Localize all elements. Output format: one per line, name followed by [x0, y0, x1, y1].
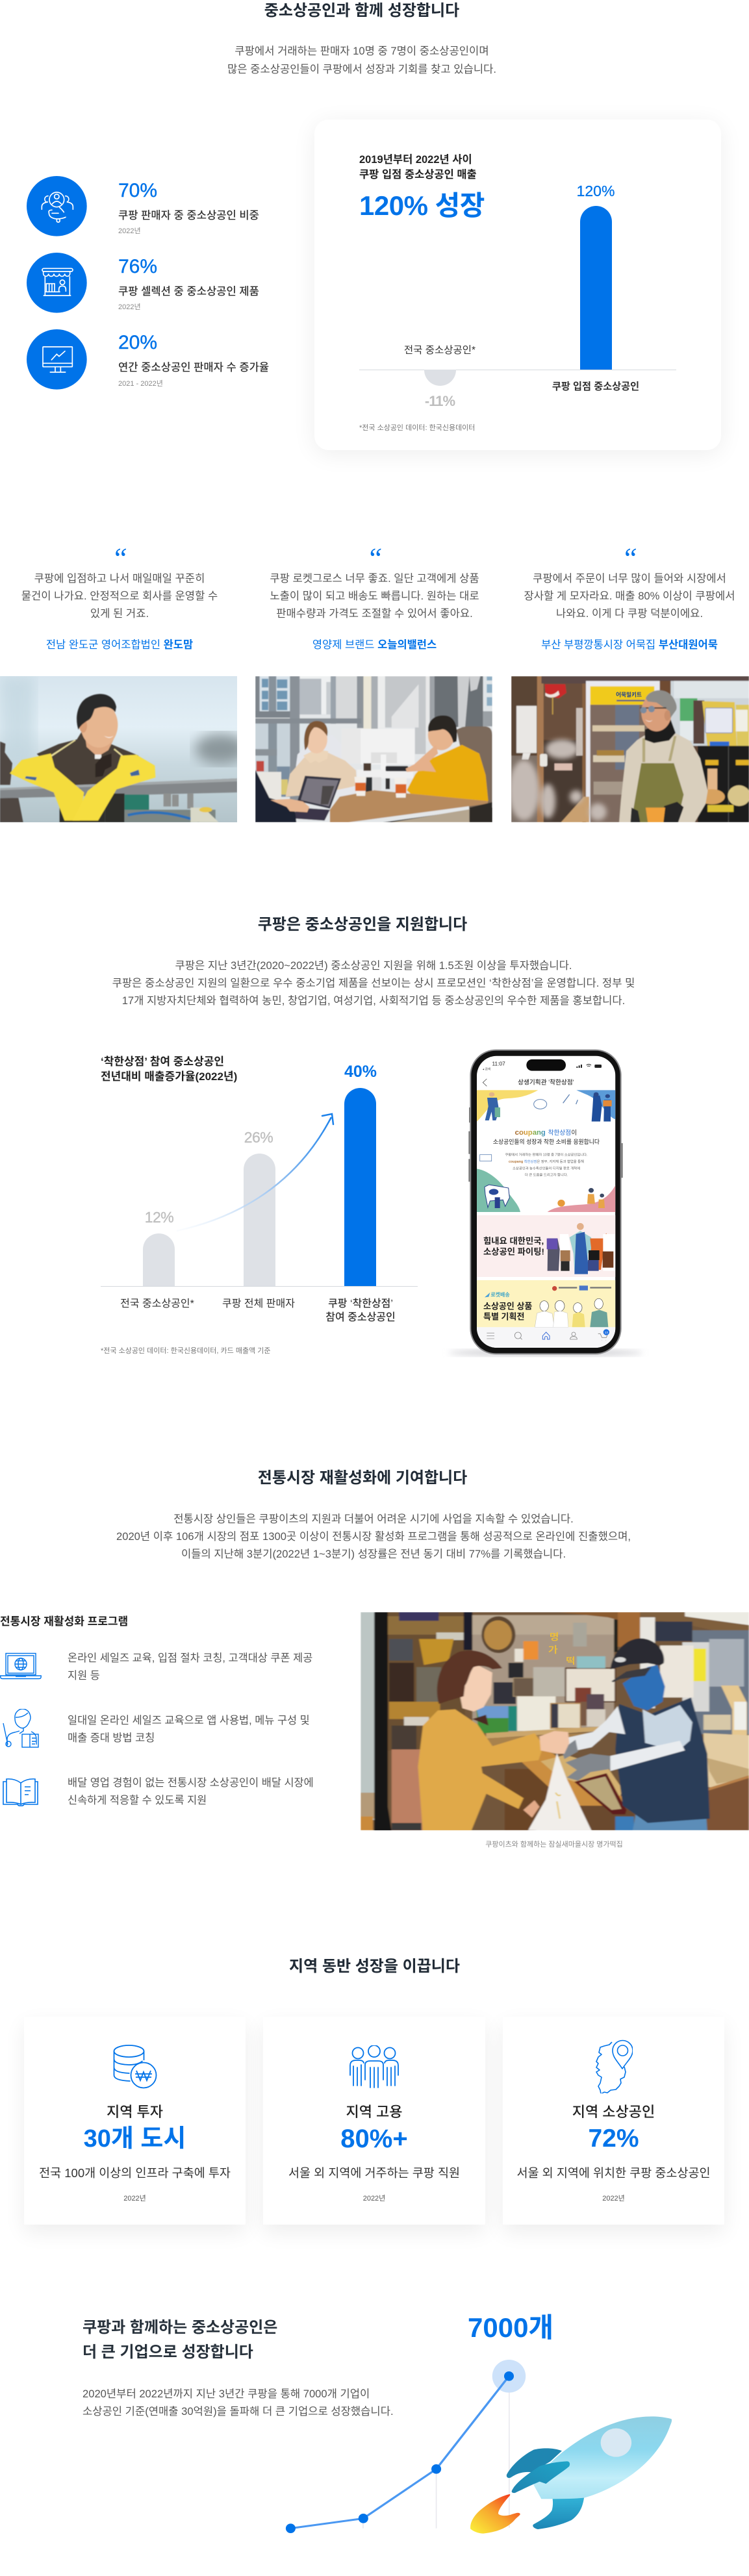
bar chart: sales growth: 쿠팡 ‘착한상점’ [328, 1298, 393, 1309]
stat 20%: 2021 - 2022년 [118, 380, 163, 388]
section text: 17개 지방자치단체와 협력하여 농민, 창업기업, 여성기업, 사회적기업 등 중소상공인의 우수한 제품을 홍보합니다. [122, 994, 625, 1007]
phone mockup: good store page: 13 [605, 1331, 608, 1334]
stat 76% [118, 256, 259, 311]
value 40%: 40% [344, 1063, 377, 1081]
value: 30개 도시 [84, 2125, 186, 2153]
date: 2022년 [602, 2195, 625, 2203]
phone mockup: good store page: 소상공인과 농수축산인들의 디지털 판로 개척에 [513, 1165, 580, 1170]
program item 1: 온라인 세일즈 교육, 입점 절차 코칭, 고객대상 쿠폰 제공 [68, 1652, 312, 1664]
testimonial 1: 물건이 나가요. 안정적으로 회사를 운영할 수 [21, 590, 218, 601]
stat 20%: 연간 중소상공인 판매자 수 증가율 [118, 361, 269, 373]
section text: 2020년 이후 106개 시장의 점포 1300곳 이상이 전통시장 활성화 프로그램을 통해 성공적으로 온라인에 진출했으며, [116, 1530, 631, 1543]
value 120%: 120% [577, 183, 615, 199]
photo: fishcake shop owner: 어묵밀키트 [616, 690, 642, 698]
testimonial 1: 있게 된 거죠. [90, 607, 149, 620]
label: 지역 투자 [107, 2104, 163, 2120]
icon: storefront circle [27, 253, 87, 313]
icon: coins with won [113, 2045, 157, 2089]
bar 40% [344, 1088, 376, 1286]
section text: 쿠팡은 지난 3년간(2020~2022년) 중소상공인 지원을 위해 1.5조원 이상을 투자했습니다. [175, 959, 572, 972]
description: 서울 외 지역에 거주하는 쿠팡 직원 [288, 2166, 460, 2180]
footnote: *전국 소상공인 데이터: 한국신용데이터, 카드 매출액 기준 [101, 1347, 270, 1355]
label Coupang sellers: 쿠팡 입점 중소상공인 [552, 381, 639, 392]
program item 2: 일대일 온라인 세일즈 교육으로 앱 사용법, 메뉴 구성 및 [68, 1715, 310, 1726]
icon: laptop globe [0, 1652, 42, 1680]
section title: traditional markets: 전통시장 재활성화에 기여합니다 [258, 1469, 467, 1487]
section title: supporting small businesses: 쿠팡은 중소상공인을 지원합니다 [258, 916, 467, 933]
testimonial 2: 판매수량과 가격도 조절할 수 있어서 좋아요. [276, 607, 473, 620]
program item 2 [68, 1715, 310, 1743]
bar chart: sales growth: 쿠팡 전체 판매자 [222, 1298, 295, 1309]
program item 3: 배달 영업 경험이 없는 전통시장 소상공인이 배달 시장에 [68, 1777, 314, 1789]
phone mockup: good store page: coupang 착한상점은 정부, 지자체 등과 협업을 통해 [509, 1159, 584, 1164]
panel: 120% growth chart card [314, 120, 721, 450]
line chart with rocket [286, 2360, 672, 2534]
panel: regional jobs [263, 2017, 485, 2225]
bar 12% [143, 1233, 175, 1286]
title: grow with small businesses: 중소상공인과 함께 성장합니다 [264, 2, 459, 19]
stat 70% [118, 180, 259, 235]
photo: market delivery: 가 [548, 1645, 558, 1656]
label: 지역 고용 [346, 2104, 403, 2120]
phone mockup: good store page: 소상공인들의 성장과 착한 소비를 응원합니다 [493, 1138, 600, 1145]
section text [116, 1513, 631, 1560]
description: 전국 100개 이상의 인프라 구축에 투자 [39, 2166, 231, 2180]
program heading: 전통시장 재활성화 프로그램 [0, 1615, 128, 1628]
icon: seller search circle [27, 176, 87, 236]
value -11%: -11% [425, 393, 455, 409]
photo: market delivery: 떡 [566, 1656, 575, 1666]
testimonial 3: 나와요. 이게 다 쿠팡 덕분이에요. [556, 607, 703, 620]
photo: market delivery [361, 1612, 749, 1830]
stat 70%: 쿠팡 판매자 중 중소상공인 비중 [118, 209, 259, 221]
testimonial 3 [524, 542, 735, 651]
program item 3 [68, 1777, 314, 1806]
section text: 쿠팡은 중소상공인 지원의 일환으로 우수 중소기업 제품을 선보이는 상시 프로모션인 ‘착한상점’을 운영합니다. 정부 및 [112, 977, 635, 989]
stat 70%: 2022년 [118, 227, 141, 235]
bar 26% [244, 1154, 275, 1286]
date: 2022년 [123, 2195, 146, 2203]
phone mockup: good store page: 소상공인 파이팅! [483, 1247, 544, 1257]
icon: monitor chart circle [27, 329, 87, 390]
chart heading: 전년대비 매출증가율(2022년) [101, 1070, 237, 1083]
intro text: 쿠팡에서 거래하는 판매자 10명 중 7명이 중소상공인이며 [235, 45, 489, 57]
phone mockup: good store page: 로켓배송 [490, 1291, 510, 1298]
phone mockup: good store page: 착한상점이 [548, 1129, 577, 1137]
label: 지역 소상공인 [572, 2104, 655, 2120]
intro text: 많은 중소상공인들이 쿠팡에서 성장과 기회를 찾고 있습니다. [227, 63, 496, 75]
testimonial 3: “ [622, 542, 637, 574]
phone mockup: good store page: 쿠팡에서 거래하는 판매자 10명 중 7명이 소상공인입니다. [505, 1152, 588, 1157]
stat 76%: 76% [118, 256, 157, 277]
value 26%: 26% [244, 1129, 273, 1146]
value 12%: 12% [145, 1209, 173, 1226]
chart heading [359, 153, 477, 181]
stat 76%: 2022년 [118, 303, 141, 311]
program item 1: 지원 등 [68, 1669, 100, 1681]
icon: Korea map pin [596, 2039, 633, 2093]
phone mockup: good store page: 소상공인 상품 [483, 1301, 532, 1311]
date: 2022년 [363, 2195, 385, 2203]
section text: 전통시장 상인들은 쿠팡이츠의 지원과 더불어 어려운 시기에 사업을 지속할 수 있었습니다. [173, 1513, 574, 1525]
body text: 2020년부터 2022년까지 지난 3년간 쿠팡을 통해 7000개 기업이 [83, 2388, 370, 2400]
labels: 전국 중소상공인* [120, 1298, 194, 1309]
icon: coach person [3, 1709, 39, 1748]
phone mockup: good store page: ◂ 검색 [483, 1067, 490, 1071]
label national: 전국 중소상공인* [404, 345, 476, 356]
panel: regional small business [503, 2017, 724, 2225]
chart heading: ‘착한상점’ 참여 중소상공인 [101, 1055, 224, 1068]
phone mockup: good store page: 특별 기획전 [483, 1312, 524, 1322]
panel: regional investment [24, 2017, 246, 2225]
testimonial 3: 장사할 게 모자라요. 매출 80% 이상이 쿠팡에서 [524, 590, 735, 601]
heading: grow into bigger firms: 더 큰 기업으로 성장합니다 [83, 2343, 253, 2361]
heading: grow into bigger firms: 쿠팡과 함께하는 중소상공인은 [83, 2319, 277, 2336]
axis line [101, 1286, 418, 1287]
value: 80%+ [340, 2125, 408, 2153]
phone mockup: good store page: 더 큰 도움을 드리고자 합니다. [525, 1172, 568, 1178]
program item 1 [68, 1652, 312, 1681]
testimonial 2: 영양제 브랜드 오늘의밸런스 [312, 639, 437, 651]
phone mockup: good store page: 11:07 [492, 1061, 505, 1067]
stat 76%: 쿠팡 셀렉션 중 중소상공인 제품 [118, 285, 259, 297]
photo caption: 쿠팡이츠와 함께하는 잠실새마을시장 명가떡집 [485, 1841, 623, 1849]
icon: open book [3, 1778, 38, 1806]
stat 20%: 20% [118, 332, 157, 353]
bar chart: sales growth: 참여 중소상공인 [325, 1312, 396, 1323]
photo: market delivery: 명 [550, 1632, 559, 1643]
testimonial 1: “ [112, 542, 127, 574]
big number: 120% 성장 [359, 190, 485, 221]
testimonial 1: 전남 완도군 영어조합법인 완도맘 [46, 639, 193, 651]
phone mockup: good store page: 힘내요 대한민국, [483, 1236, 544, 1246]
bar: national [424, 370, 456, 386]
testimonial 2 [270, 542, 479, 651]
section text: 이들의 지난해 3분기(2022년 1~3분기) 성장률은 전년 동기 대비 77%를 기록했습니다. [181, 1548, 566, 1560]
photo: oyster farmer with yellow gloves [0, 676, 237, 822]
chart heading: 쿠팡 입점 중소상공인 매출 [359, 169, 477, 181]
program item 2: 매출 증대 방법 코칭 [68, 1732, 155, 1743]
intro text [227, 45, 496, 75]
bar chart: sales growth [101, 1055, 418, 1355]
testimonial 1 [21, 542, 218, 651]
footnote: *전국 소상공인 데이터: 한국신용데이터 [359, 424, 475, 432]
section title: regional growth: 지역 동반 성장을 이끕니다 [289, 1958, 460, 1975]
phone mockup: good store page: coupang [515, 1129, 546, 1137]
value: 72% [588, 2125, 639, 2153]
testimonial 3: 부산 부평깡통시장 어묵집 부산대원어묵 [541, 639, 718, 651]
chart heading [101, 1055, 237, 1083]
body text: 소상공인 기준(연매출 30억원)을 돌파해 더 큰 기업으로 성장했습니다. [83, 2405, 394, 2418]
description: 서울 외 지역에 위치한 쿠팡 중소상공인 [516, 2166, 711, 2180]
testimonial 2: 쿠팡 로켓그로스 너무 좋죠. 일단 고객에게 상품 [270, 572, 479, 585]
icon: people [349, 2045, 399, 2088]
value 7000: 7000개 [468, 2312, 553, 2343]
testimonial 2: 노출이 많이 되고 배송도 빠릅니다. 원하는 대로 [270, 590, 479, 601]
program item 3: 신속하게 적응할 수 있도록 지원 [68, 1794, 207, 1806]
heading: grow into bigger firms [83, 2319, 277, 2361]
photo: office meeting [255, 676, 492, 822]
testimonial 2: “ [366, 542, 383, 574]
stat 70%: 70% [118, 180, 157, 201]
testimonial 1: 쿠팡에 입점하고 나서 매일매일 꾸준히 [34, 572, 205, 585]
bar: Coupang sellers [580, 206, 612, 370]
body text [83, 2388, 394, 2418]
phone mockup: good store page: 상생기획관 '착한상점' [518, 1079, 574, 1087]
testimonial 3: 쿠팡에서 주문이 너무 많이 들어와 시장에서 [533, 572, 726, 585]
stat 20% [118, 332, 269, 388]
growth arrow [186, 1113, 334, 1229]
photo: fishcake shop owner [511, 676, 749, 822]
chart heading: 2019년부터 2022년 사이 [359, 154, 472, 166]
phone mockup: good store page [451, 1050, 641, 1357]
section text [112, 959, 635, 1007]
